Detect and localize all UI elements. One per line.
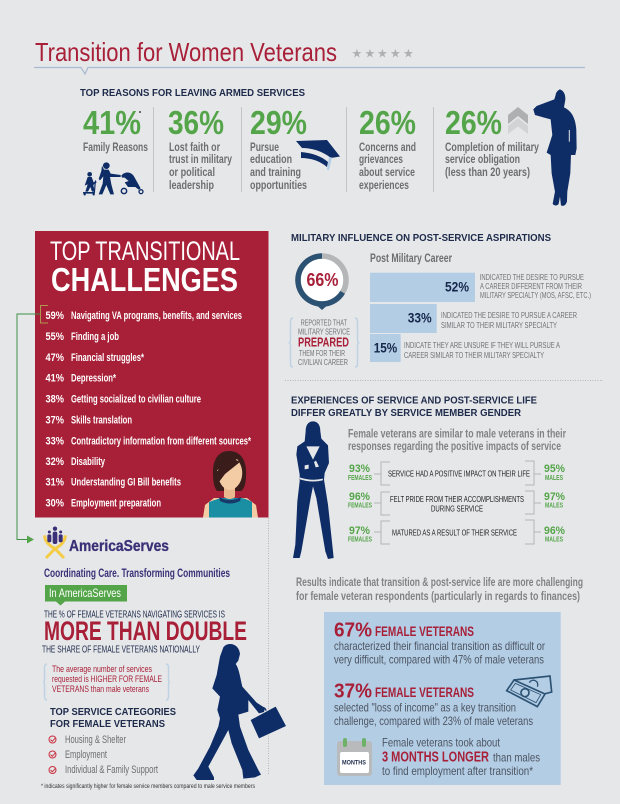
donut chart 66% bbox=[298, 256, 346, 310]
list of challenges: Skills translation bbox=[71, 414, 132, 426]
comparison row: pride bbox=[348, 491, 565, 515]
comparison row: matured bbox=[348, 520, 565, 544]
stat: 67%: very difficult, compared with 47% of male veterans bbox=[334, 652, 544, 666]
list of challenges: Employment preparation bbox=[71, 498, 161, 510]
arrow: connector from first challenge to AmericaServes bbox=[17, 314, 40, 544]
heading: top service categories bbox=[50, 706, 176, 730]
stat: 3 months longer: to find employment after transition* bbox=[382, 764, 533, 778]
list of challenges: 33% bbox=[46, 435, 64, 447]
reason: concerns: 26% bbox=[359, 104, 416, 141]
logo: AmericaServes bbox=[45, 526, 169, 558]
stat: 3 months longer: than males bbox=[493, 751, 540, 765]
reason: family reasons: Family Reasons bbox=[83, 140, 148, 154]
text: female similar to male bbox=[348, 427, 566, 453]
bar 52%: INDICATED THE DESIRE TO PURSUE bbox=[480, 273, 584, 282]
icon: calendar months: MONTHS bbox=[342, 760, 367, 766]
reason: completion of service: Completion of military bbox=[445, 140, 539, 154]
reason: lost faith: trust in military bbox=[169, 152, 232, 166]
icon: five stars: ★ bbox=[377, 46, 388, 60]
icon: five stars: ★ bbox=[364, 46, 375, 60]
bar 15% bbox=[370, 334, 560, 362]
comparison row: pride: FELT PRIDE FROM THEIR ACCOMPLISHMENTS bbox=[390, 495, 524, 504]
panel: AmericaServes bbox=[41, 526, 286, 790]
logo: AmericaServes: AmericaServes bbox=[69, 538, 169, 555]
list of challenges bbox=[46, 310, 251, 510]
bar 15%: CAREER SIMILAR TO THEIR MILITARY SPECIALTY bbox=[404, 351, 544, 360]
list of challenges: 32% bbox=[46, 456, 64, 468]
heading: experiences: DIFFER GREATLY BY SERVICE MEMBER GENDER bbox=[291, 407, 521, 419]
list of challenges: Navigating VA programs, benefits, and services bbox=[71, 310, 242, 322]
reason: lost faith: leadership bbox=[169, 178, 214, 192]
reason: education: Pursue bbox=[250, 140, 279, 154]
dotted panel edge bbox=[268, 518, 270, 775]
icon: five stars: ★ bbox=[352, 46, 362, 60]
list of challenges: 30% bbox=[46, 498, 64, 510]
callout: prepared: CIVILIAN CAREER bbox=[298, 358, 348, 367]
stat: 37%: 37% bbox=[334, 681, 372, 703]
reason: concerns: experiences bbox=[359, 178, 409, 192]
heading: military influence: MILITARY INFLUENCE ON POST-SERVICE ASPIRATIONS bbox=[291, 232, 551, 244]
panel: top transitional challenges bbox=[35, 231, 268, 518]
stat: 67% bbox=[334, 620, 545, 666]
heading: challenges: CHALLENGES bbox=[51, 261, 238, 298]
reason: completion of service: (less than 20 years) bbox=[445, 165, 530, 179]
bracket highlighting first item bbox=[40, 306, 48, 323]
stat: 37%: challenge, compared with 23% of male veterans bbox=[334, 714, 533, 728]
callout: average number of services: VETERANS than male veterans bbox=[52, 684, 149, 695]
list of challenges: Understanding GI Bill benefits bbox=[71, 477, 181, 489]
icon: walking woman with briefcase bbox=[193, 644, 286, 780]
icon: woman avatar bbox=[203, 451, 258, 518]
text: share nationally: THE SHARE OF FEMALE VETERANS NATIONALLY bbox=[42, 645, 200, 656]
reason: concerns bbox=[359, 104, 416, 192]
callout: average number of services: The average number of services bbox=[52, 664, 152, 675]
list: service categories: Housing & Shelter bbox=[65, 734, 126, 746]
comparison row: pride: 97% bbox=[544, 491, 565, 503]
callout: average number of services bbox=[43, 664, 170, 700]
reason: education bbox=[250, 104, 307, 192]
text: percent navigating: THE % OF FEMALE VETERANS NAVIGATING SERVICES IS bbox=[44, 610, 225, 621]
list: service categories bbox=[49, 734, 158, 776]
list of challenges: 41% bbox=[46, 373, 64, 385]
comparison row: matured: MALES bbox=[545, 537, 563, 544]
reason: lost faith: Lost faith or bbox=[169, 140, 220, 154]
callout: prepared: PREPARED bbox=[298, 335, 349, 350]
comparison row: pride: FEMALES bbox=[348, 502, 372, 510]
heading: top transitional: TOP TRANSITIONAL bbox=[50, 236, 240, 266]
heading: top reasons: TOP REASONS FOR LEAVING ARMED SERVICES bbox=[80, 87, 305, 99]
panel: top reasons bbox=[80, 87, 577, 206]
heading: experiences bbox=[291, 395, 537, 419]
list: service categories: Employment bbox=[65, 749, 107, 761]
donut chart 66%: 66% bbox=[306, 270, 338, 290]
icon: rank chevrons bbox=[508, 107, 528, 134]
bar 33% bbox=[370, 304, 577, 333]
bar chart: post military career: Post Military Career bbox=[370, 251, 452, 265]
comparison row: matured: 96% bbox=[544, 525, 565, 537]
icon: five stars bbox=[352, 46, 414, 60]
list of challenges: 31% bbox=[46, 477, 64, 489]
divider bbox=[154, 107, 434, 192]
list of challenges: Contradictory information from different sources* bbox=[71, 435, 251, 447]
icon: saluting soldier bbox=[533, 89, 577, 206]
icon: five stars: ★ bbox=[390, 46, 401, 60]
reason: concerns: about service bbox=[359, 165, 415, 179]
stat: 3 months longer: 3 MONTHS LONGER bbox=[382, 750, 489, 766]
comparison row: positive impact: 93% bbox=[349, 463, 370, 475]
bar 15%: INDICATE THEY ARE UNSURE IF THEY WILL PURSUE A bbox=[404, 341, 560, 350]
comparison row: positive impact: MALES bbox=[545, 475, 563, 482]
reason: education: opportunities bbox=[250, 178, 307, 192]
icon: banknotes bbox=[507, 676, 552, 707]
list of challenges: 59% bbox=[46, 310, 64, 322]
reason: family reasons: 41% bbox=[83, 104, 141, 141]
icon: woman with crossed arms bbox=[293, 421, 334, 559]
bar 52% bbox=[370, 273, 591, 302]
list of challenges: 37% bbox=[46, 414, 64, 426]
list of challenges: Disability bbox=[71, 456, 106, 468]
comparison row: pride: 96% bbox=[349, 491, 370, 503]
reason: concerns: Concerns and bbox=[359, 140, 416, 154]
title rule with notch bbox=[34, 68, 585, 74]
list of challenges: Finding a job bbox=[71, 331, 119, 343]
stat: 3 months longer bbox=[382, 736, 540, 778]
bar 33%: SIMILAR TO THEIR MILITARY SPECIALTY bbox=[441, 321, 557, 330]
comparison row: pride: MALES bbox=[545, 502, 563, 510]
panel: female veterans finance callout bbox=[324, 612, 561, 785]
list of challenges: 47% bbox=[46, 352, 64, 364]
reason: lost faith: or political bbox=[169, 165, 215, 179]
callout: prepared: REPORTED THAT bbox=[301, 319, 347, 328]
panel: military influence bbox=[288, 232, 591, 367]
stat: 67%: FEMALE VETERANS bbox=[375, 623, 474, 639]
list: service categories: Individual & Family Support bbox=[65, 764, 158, 776]
tag: In AmericaServes: In AmericaServes bbox=[49, 586, 121, 600]
reason: education: and training bbox=[250, 165, 301, 179]
reason: completion of service: service obligation bbox=[445, 152, 520, 166]
bar 33%: 33% bbox=[408, 311, 432, 326]
stat: 37%: selected "loss of income" as a key transition bbox=[334, 701, 516, 715]
reason: completion of service: 26% bbox=[445, 104, 502, 141]
callout: prepared bbox=[288, 318, 360, 367]
list of challenges: Depression* bbox=[71, 373, 116, 385]
reason: completion of service bbox=[445, 104, 539, 179]
comparison row: pride: DURING SERVICE bbox=[431, 505, 483, 514]
heading: experiences: EXPERIENCES OF SERVICE AND POST-SERVICE LIFE bbox=[291, 395, 537, 407]
icon: calendar months bbox=[337, 738, 372, 776]
reason: education: education bbox=[250, 152, 292, 166]
comparison row: matured: 97% bbox=[349, 525, 370, 537]
heading: top service categories: FOR FEMALE VETERANS bbox=[50, 718, 165, 730]
stat: 3 months longer: Female veterans took about bbox=[382, 736, 501, 750]
panel: experiences by gender bbox=[291, 395, 583, 603]
bar chart: post military career bbox=[370, 251, 591, 362]
icon: mother child and stroller bbox=[83, 162, 143, 195]
text: more than double: MORE THAN DOUBLE bbox=[44, 616, 247, 646]
reason: lost faith bbox=[168, 104, 232, 192]
bar 52%: 52% bbox=[445, 280, 469, 295]
reason: lost faith: 36% bbox=[168, 104, 224, 141]
footnote: * indicates significantly higher for female service members compared to male service members bbox=[41, 783, 256, 790]
stat: 37%: FEMALE VETERANS bbox=[375, 684, 474, 700]
list of challenges: 38% bbox=[46, 394, 64, 406]
icon: graduation cap bbox=[296, 140, 340, 170]
bar 33%: INDICATED THE DESIRE TO PURSUE A CAREER bbox=[441, 311, 577, 320]
text: results indicate bbox=[296, 575, 583, 603]
icon: five stars: ★ bbox=[403, 46, 414, 60]
list of challenges: Getting socialized to civilian culture bbox=[71, 394, 201, 406]
title: Transition for Women Veterans bbox=[35, 37, 337, 67]
stat: 37% bbox=[334, 681, 533, 728]
reason: education: 29% bbox=[250, 104, 307, 141]
stat: 67%: characterized their financial transition as difficult or bbox=[334, 639, 545, 653]
comparison row: positive impact: 95% bbox=[544, 463, 565, 475]
tagline: Coordinating Care. Transforming Communities bbox=[44, 566, 230, 580]
list of challenges: Financial struggles* bbox=[71, 352, 144, 364]
list of challenges: 55% bbox=[46, 331, 64, 343]
comparison row: matured: MATURED AS A RESULT OF THEIR SERVICE bbox=[392, 529, 517, 538]
comparison row: positive impact bbox=[348, 461, 565, 485]
reason: concerns: grievances bbox=[359, 152, 403, 166]
heading: top service categories: TOP SERVICE CATEGORIES bbox=[50, 706, 176, 718]
comparison row: matured: FEMALES bbox=[348, 537, 372, 544]
tag: In AmericaServes bbox=[45, 585, 127, 606]
callout: prepared: MILITARY SERVICE bbox=[298, 328, 350, 337]
stat: 67%: 67% bbox=[334, 620, 372, 642]
bar 15%: 15% bbox=[374, 341, 397, 356]
comparison row: positive impact: SERVICE HAD A POSITIVE IMPACT ON THEIR LIFE bbox=[388, 470, 530, 478]
comparison row: positive impact: FEMALES bbox=[348, 475, 372, 482]
callout: prepared: THEM FOR THEIR bbox=[299, 349, 345, 358]
bar 52%: A CAREER DIFFERENT FROM THEIR bbox=[480, 282, 582, 291]
callout: average number of services: requested is HIGHER FOR FEMALE bbox=[52, 674, 162, 685]
